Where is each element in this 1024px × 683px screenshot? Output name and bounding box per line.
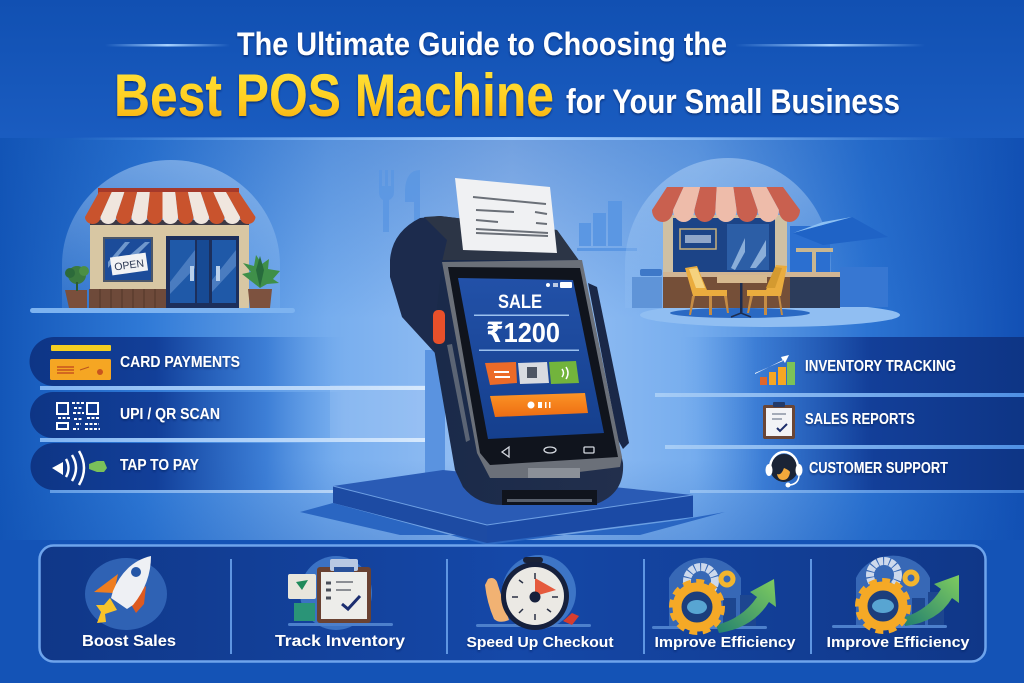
heading: for your small business: for Your Small Business: [566, 83, 900, 121]
heading: best pos machine: Best POS Machine: [114, 62, 554, 129]
icon: rocket: [85, 556, 167, 630]
orange side button: [433, 310, 445, 344]
band: customer support: [690, 449, 1024, 490]
benefit: improve efficiency 1: [652, 558, 796, 651]
icon: gears and arrow: [832, 556, 959, 632]
umbrella and back structure: [790, 217, 888, 307]
band: sales reports: [680, 397, 1024, 445]
illustration: faded bar chart: [577, 201, 637, 251]
shop wall: [90, 222, 249, 308]
amount: ₹1200: [486, 317, 560, 348]
grey bezel: [442, 260, 622, 478]
illustration: small shop: [30, 160, 295, 313]
icon: card: [50, 345, 111, 380]
benefit: boost sales: Boost Sales: [82, 633, 176, 650]
icon: clipboard: [763, 402, 795, 439]
band: inventory tracking: [680, 337, 1024, 393]
home button: [528, 468, 580, 478]
left plant: [65, 266, 89, 308]
benefit: improve efficiency 1: Improve Efficiency: [654, 635, 796, 651]
platform: [300, 470, 725, 545]
glass door: [166, 236, 239, 308]
pill: card payments: CARD PAYMENTS: [120, 354, 240, 371]
pill: upi qr scan: [30, 392, 345, 438]
left chair: [685, 266, 729, 315]
payment buttons: [485, 361, 579, 385]
right chair: [747, 265, 787, 315]
benefit: track inventory: [275, 556, 405, 650]
awning: [85, 188, 256, 225]
back bin: [632, 269, 662, 308]
icon: clipboard checklist: [288, 556, 393, 630]
dividers: [230, 559, 812, 654]
machine body: [433, 260, 623, 505]
pay button: [490, 393, 588, 417]
pos machine: [390, 178, 629, 505]
ground ellipse: [640, 303, 900, 327]
title: [105, 26, 925, 129]
window with open sign: [103, 237, 153, 282]
band: customer support: CUSTOMER SUPPORT: [809, 460, 948, 477]
printer top: [424, 216, 580, 262]
benefits panel: [40, 546, 986, 662]
benefit: track inventory: Track Inventory: [275, 633, 405, 650]
separator lines: [655, 393, 1024, 493]
feature list: business tools: [655, 337, 1024, 493]
display: [458, 278, 604, 439]
black screen frame: [448, 267, 618, 465]
card slot rail: [447, 344, 470, 442]
icon: headset agent: [766, 452, 802, 488]
benefit: speed up checkout: Speed Up Checkout: [466, 635, 614, 651]
panel background: [40, 546, 986, 662]
icon: contactless: [52, 451, 107, 485]
feature list: payments: [29, 337, 425, 493]
icon: growth chart: [755, 355, 795, 385]
bottom printer slot: [502, 490, 597, 505]
dome: [62, 160, 280, 308]
right plant: [242, 255, 280, 308]
separator lines: [40, 386, 425, 493]
band: sales reports: SALES REPORTS: [805, 411, 915, 428]
illustration: faded fork and knife: [379, 170, 420, 232]
printer housing: [390, 216, 580, 353]
table: [717, 275, 767, 317]
pill: tap to pay: TAP TO PAY: [120, 457, 199, 474]
benefit: boost sales: [82, 556, 176, 650]
sale label: SALE: [498, 292, 542, 313]
counter: [663, 272, 840, 308]
band: inventory tracking: INVENTORY TRACKING: [805, 358, 956, 375]
status icons: [546, 282, 572, 288]
side strap: [588, 283, 629, 449]
awning stripes: [673, 187, 779, 222]
icon: qr code: [57, 403, 100, 429]
benefit: improve efficiency 2: Improve Efficiency: [826, 635, 970, 651]
benefit: improve efficiency 2: [826, 556, 970, 651]
amount: [474, 314, 579, 351]
pill: upi qr scan: UPI / QR SCAN: [120, 406, 220, 423]
receipt: [455, 178, 557, 253]
pill: card payments: [29, 337, 345, 386]
window with open sign: OPEN: [114, 257, 145, 273]
nav icons: [502, 447, 594, 457]
illustration: cafe: [625, 158, 900, 327]
dome: [625, 158, 831, 308]
icon: gears and arrow: [652, 558, 776, 633]
benefit: speed up checkout: [466, 555, 614, 651]
icon: stopwatch: [476, 555, 591, 630]
cafe front: [663, 215, 787, 275]
pill: tap to pay: [30, 443, 345, 490]
ground line: [30, 308, 295, 313]
wooden base: [89, 289, 166, 308]
awning: [652, 187, 800, 222]
heading line 1: The Ultimate Guide to Choosing the: [237, 26, 727, 62]
